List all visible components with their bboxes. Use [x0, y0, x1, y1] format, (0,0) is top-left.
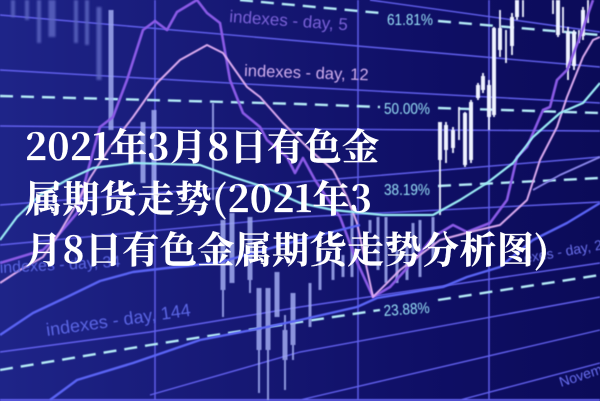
- moving average: day 5 purple: [0, 0, 593, 297]
- label: indexes day 5: indexes - day, 5: [229, 7, 349, 34]
- moving average: day 12 pink: [0, 37, 600, 297]
- title: 月8日有色金属期货走势分析图): [25, 220, 550, 274]
- label: 23.88%: 23.88%: [383, 300, 430, 320]
- label: 38.19%: 38.19%: [384, 182, 430, 199]
- label: 50.00%: 50.00%: [384, 101, 430, 118]
- label: indexes day 12: indexes - day, 12: [244, 62, 369, 84]
- label: indexes day 34: indexes - day, 34: [0, 254, 121, 277]
- label: 61.81%: 61.81%: [387, 12, 433, 29]
- title: [25, 117, 550, 274]
- moving average: cyan: [0, 83, 600, 240]
- moving average: blue long term: [0, 157, 600, 400]
- title: 2021年3月8日有色金: [25, 117, 379, 171]
- title: 属期货走势(2021年3: [25, 168, 372, 222]
- label: indexes day 144: indexes - day, 144: [45, 300, 192, 340]
